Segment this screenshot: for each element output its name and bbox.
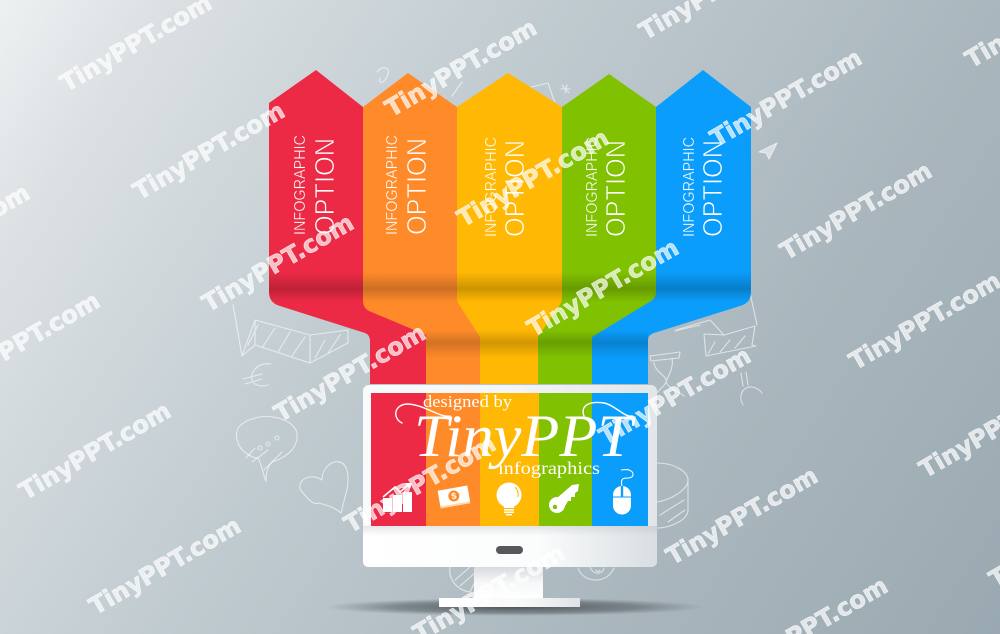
- label: orange option: INFOGRAPHIC: [384, 135, 401, 235]
- monitor: [363, 385, 657, 607]
- watermarks: repeating TinyPPT.com: TinyPPT.com: [339, 429, 501, 539]
- arrows: five colored option arrows: [269, 70, 751, 384]
- text: infographics: infographics: [498, 458, 600, 478]
- label: red option: INFOGRAPHIC: [292, 135, 309, 235]
- monitor: chin: [363, 526, 657, 567]
- label: yellow option: INFOGRAPHIC: [483, 137, 500, 237]
- text: designed by: designed by: [423, 392, 513, 411]
- watermarks: repeating TinyPPT.com: TinyPPT.com: [775, 156, 937, 266]
- doodle: star and paper: [527, 83, 570, 106]
- watermarks: repeating TinyPPT.com: TinyPPT.com: [661, 461, 823, 571]
- monitor: stand base: [439, 598, 580, 607]
- icon: bar chart: [383, 483, 412, 512]
- screen icons: [383, 470, 633, 515]
- arrow: yellow: [457, 73, 562, 384]
- text: TinyPPT script: TinyPPT: [414, 403, 636, 469]
- doodle: hourglass: [650, 352, 684, 400]
- watermarks: repeating TinyPPT.com: TinyPPT.com: [128, 96, 290, 206]
- floor shadow: [325, 598, 705, 616]
- watermarks: repeating TinyPPT.com: TinyPPT.com: [705, 43, 867, 153]
- label: yellow option: [483, 137, 530, 237]
- doodle: top scribble: [377, 68, 472, 108]
- shading: upper fold band: [269, 275, 751, 300]
- label: orange option: OPTION: [401, 138, 432, 235]
- arrow: blue: [590, 70, 751, 384]
- arrow: orange: [363, 73, 480, 384]
- shading: lower fold band: [426, 330, 648, 358]
- doodles: hand-drawn sketches behind the monitor: [233, 68, 777, 592]
- doodle: spiral under monitor: [578, 567, 614, 580]
- icon: mouse: [613, 470, 633, 514]
- label: red option: [292, 135, 340, 235]
- label: orange option: [384, 135, 432, 235]
- text swashes: [396, 403, 632, 423]
- label: yellow option: OPTION: [499, 140, 530, 237]
- monitor: screen stripes: [371, 393, 648, 526]
- watermarks: repeating TinyPPT.com: TinyPPT.com: [380, 13, 542, 123]
- icon: banknotes: [438, 486, 470, 508]
- monitor: button: [496, 546, 523, 554]
- doodle: cylinder: [657, 463, 688, 528]
- label: red option: OPTION: [309, 138, 340, 235]
- watermarks: repeating TinyPPT.com: TinyPPT.com: [14, 396, 176, 506]
- monitor: stand neck: [474, 565, 543, 599]
- doodle: left bar block: [233, 305, 348, 363]
- icon: key: [549, 484, 579, 513]
- label: blue option: [681, 137, 728, 237]
- screen title: designed by TinyPPT infographics: [396, 392, 636, 478]
- icon: light bulb: [496, 482, 522, 515]
- watermarks: repeating TinyPPT.com: TinyPPT.com: [84, 511, 246, 621]
- watermarks: repeating TinyPPT.com: TinyPPT.com: [522, 233, 684, 343]
- doodle: leaf under monitor: [450, 567, 478, 592]
- label: green option: OPTION: [600, 140, 631, 237]
- arrow: red: [269, 70, 430, 384]
- watermarks: repeating TinyPPT.com: TinyPPT.com: [197, 208, 359, 318]
- label: blue option: INFOGRAPHIC: [681, 137, 698, 237]
- doodle: curved mark: [741, 372, 762, 405]
- icon: banknotes: $: [450, 491, 457, 501]
- label: blue option: OPTION: [697, 140, 728, 237]
- arrow: green: [535, 74, 656, 384]
- watermarks: repeating TinyPPT.com: TinyPPT.com: [269, 318, 431, 428]
- monitor: body: [363, 385, 657, 567]
- watermarks: repeating TinyPPT.com: TinyPPT.com: [594, 341, 756, 451]
- watermarks: repeating TinyPPT.com: TinyPPT.com: [452, 123, 614, 233]
- option labels: [292, 135, 728, 237]
- doodle: speech bubble: [236, 416, 297, 481]
- label: green option: [584, 137, 631, 237]
- doodle: right bar block: [675, 288, 757, 356]
- label: green option: INFOGRAPHIC: [584, 137, 601, 237]
- doodle: euro sign: [243, 364, 271, 386]
- doodle: heart: [300, 462, 348, 513]
- doodle: paper plane: [759, 143, 777, 159]
